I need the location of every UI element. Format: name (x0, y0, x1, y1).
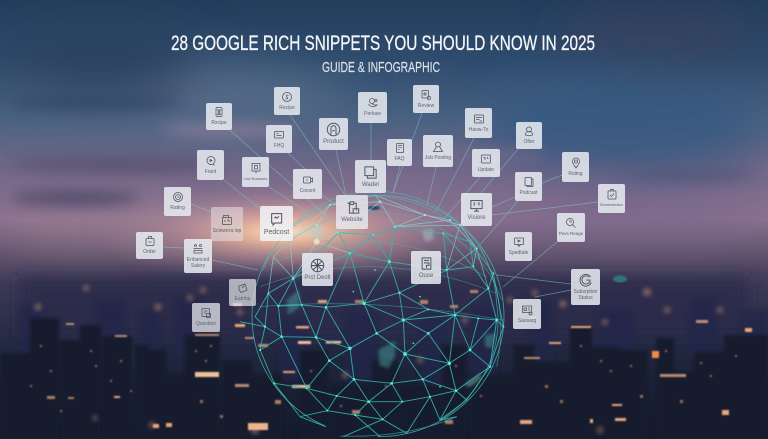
card: Sassarg: Sassarg (518, 318, 536, 324)
card: Job Posting: Job Posting (425, 155, 451, 161)
card: Question: Question (196, 321, 216, 327)
card: Product: Product (323, 139, 344, 145)
card: Rating left: Rating (170, 205, 185, 211)
card: Font: Frant (205, 169, 216, 175)
subheading: GUIDE & INFOGRAPHIC (322, 60, 440, 76)
card: FAQ: FAQ (394, 156, 404, 162)
card: Wadet (355, 160, 386, 193)
globe land patches (287, 225, 497, 387)
card: Website (336, 195, 368, 229)
globe mesh edges (240, 227, 503, 437)
card: Local Business (242, 157, 269, 187)
card: Ouse (411, 251, 441, 284)
card: FHQ: FHQ (274, 143, 284, 149)
card: Sassarg (513, 299, 541, 329)
card: Visiore (461, 193, 492, 226)
globe upper mesh edges (268, 195, 488, 293)
bokeh lights (34, 285, 723, 434)
card: Rating right (562, 152, 589, 182)
card: Review (413, 85, 439, 113)
card: Perkaw: Perkaw (364, 111, 381, 117)
card: Rating right: Rsting (568, 171, 583, 177)
card: Eatrlop: Eatrlop (235, 296, 250, 302)
card: Subscription Status: Subsrption (574, 288, 597, 294)
card: Pedcost (260, 206, 293, 241)
card: Cocont: Cocont (300, 188, 315, 194)
card: Review: Review (418, 103, 434, 109)
globe outline arcs (252, 191, 504, 437)
card: Local Business: Lecl Busnaes (243, 176, 268, 181)
card: Podcast right: Podcast (519, 190, 538, 196)
card: Recipe top (274, 87, 300, 115)
card: Subscription Status: Status (578, 295, 593, 301)
card: FAQ (387, 139, 412, 166)
card: Eatrlop (229, 279, 256, 306)
card: Update: Update (478, 167, 494, 173)
card: Sclewera iop: Sclewera iop (213, 228, 241, 234)
card: Pevs Reage (557, 213, 585, 242)
card: Prct Deolt: Prct Deolt (304, 274, 331, 280)
card: Semmstebox: Semmstebox (600, 202, 623, 207)
card: Offer right: Ofter (523, 139, 535, 145)
card: Offer right (516, 122, 542, 149)
card: Ouse: Ouse (419, 272, 433, 278)
card: Recipe left: Rxcipe (211, 120, 227, 126)
card: Pevs Reage: Pevs Reage (559, 231, 583, 236)
card: Visiore: Visiore (467, 214, 486, 220)
card: Recipe top: Recipe (279, 105, 295, 111)
distant buildings (20, 298, 768, 388)
globe mesh nodes (259, 201, 504, 420)
card: Order: Order (143, 249, 156, 255)
card: Recipe left (206, 103, 232, 130)
card: Pedcost: Pedcost (264, 228, 289, 236)
main heading: 28 GOOGLE RICH SNIPPETS YOU SHOULD KNOW IN 2025 (171, 32, 595, 55)
card: Font (197, 150, 224, 180)
card: Cocont (293, 169, 322, 199)
card: Product (319, 118, 348, 150)
card: Wadet: Wadet (362, 182, 379, 188)
card: Spedtale: Spedtale (509, 250, 528, 256)
card: Perkaw (358, 92, 387, 123)
card: Rating left (164, 187, 191, 216)
card: FHQ (266, 125, 292, 153)
card: How-To: Haow-To (469, 127, 488, 133)
card: Subscription Status (571, 269, 600, 305)
card: Website: Website (341, 217, 363, 223)
card: Spedtale (505, 232, 532, 261)
city skyline (0, 318, 768, 439)
card: Update (472, 149, 500, 177)
card: How-To (465, 108, 492, 138)
card: Job Posting (423, 135, 453, 167)
card: Prct Deolt (302, 253, 333, 286)
card: Semmstebox (598, 184, 625, 213)
card: Question (192, 303, 220, 332)
city lights (47, 290, 752, 430)
card: Podcast right (515, 172, 542, 201)
card: Order (136, 232, 163, 259)
building window dots (30, 345, 737, 418)
card: Enhanced Salery (184, 239, 212, 273)
card: Enhanced Salery: Salery (191, 263, 205, 269)
card: Sclewera iop (211, 207, 243, 241)
card: Enhanced Salery: Enhanced (187, 256, 209, 262)
